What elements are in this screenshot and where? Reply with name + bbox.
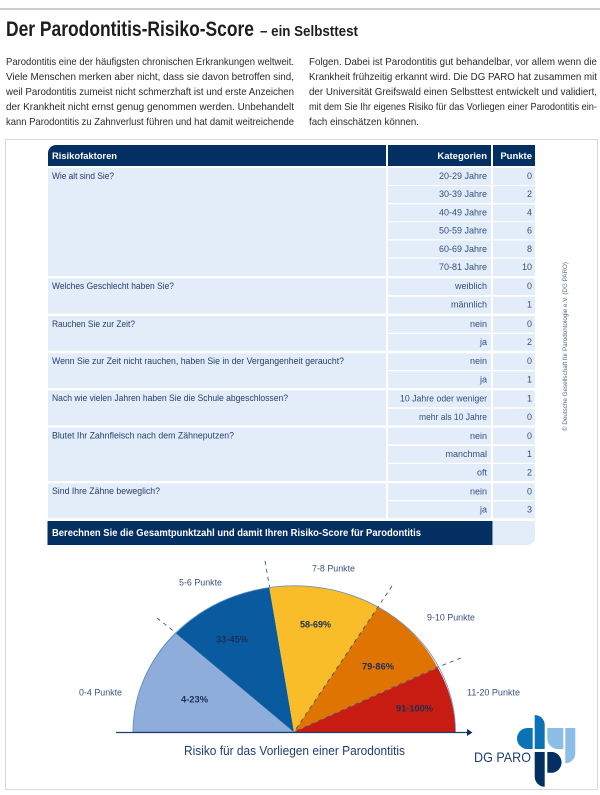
question: loose teeth: 0	[527, 486, 532, 496]
segment: 5-6 Punkte	[176, 587, 294, 732]
question: loose teeth: Sind Ihre Zähne beweglich?	[52, 486, 160, 496]
question: school years: Nach wie vielen Jahren haben Sie die Schule abgeschlossen?	[52, 393, 288, 403]
point range labels: 7-8 Punkte	[312, 564, 355, 574]
question: loose teeth: 3	[527, 504, 532, 514]
question: bleeding gums	[48, 428, 535, 481]
question: gender: Welches Geschlecht haben Sie?	[52, 281, 174, 291]
question: gender: männlich	[451, 300, 487, 310]
question: bleeding gums: nein	[470, 431, 487, 441]
table header: Kategorien	[437, 151, 487, 162]
intro text: right column: fach einschätzen können.	[309, 116, 419, 128]
percent labels: 79-86%	[362, 662, 395, 672]
question: age: 60-69 Jahre	[439, 244, 487, 254]
chart caption: Risiko für das Vorliegen einer Parodontitis	[184, 743, 405, 758]
question: former smoking: Wenn Sie zur Zeit nicht rauchen, haben Sie in der Vergangenheit geraucht?	[52, 356, 344, 366]
logo: DG PARO	[474, 715, 575, 787]
question: bleeding gums: 0	[527, 431, 532, 441]
question: former smoking: 0	[527, 356, 532, 366]
percent labels: 58-69%	[300, 620, 332, 630]
question: age: 2	[527, 189, 532, 199]
point range labels	[79, 564, 520, 698]
intro text: left column: kann Parodontitis zu Zahnverlust führen und hat damit weitreichende	[6, 116, 294, 128]
intro text: left column: Parodontitis eine der häufigsten chronischen Erkrankungen weltweit.	[6, 56, 294, 68]
question: former smoking: ja	[479, 374, 487, 384]
question: former smoking: nein	[470, 356, 487, 366]
percent labels	[181, 620, 434, 714]
question: smoking: 0	[527, 319, 532, 329]
question: age: 0	[527, 171, 532, 181]
question: age: 50-59 Jahre	[439, 226, 487, 236]
dashed boundary ticks	[157, 561, 461, 732]
question: smoking: Rauchen Sie zur Zeit?	[52, 319, 135, 329]
question: gender: 1	[527, 300, 532, 310]
intro text: left column	[5, 56, 294, 128]
question: bleeding gums: Blutet Ihr Zahnfleisch nach dem Zähneputzen?	[52, 430, 234, 440]
question: former smoking	[48, 353, 535, 388]
semicircle risk chart	[79, 561, 520, 758]
question: smoking: 2	[527, 337, 532, 347]
question: age	[48, 168, 535, 276]
table: risk factors	[48, 145, 535, 545]
question: gender	[48, 278, 535, 314]
question: age: 70-81 Jahre	[439, 262, 487, 272]
question: loose teeth: nein	[470, 486, 487, 496]
segment: 7-8 Punkte	[269, 585, 378, 732]
axis arrow	[116, 729, 472, 736]
question: gender: weiblich	[454, 281, 487, 291]
question: bleeding gums: 1	[527, 449, 532, 459]
question: bleeding gums: manchmal	[445, 449, 487, 459]
point range labels: 0-4 Punkte	[79, 688, 122, 698]
question: gender: 0	[527, 281, 532, 291]
question: loose teeth: ja	[479, 504, 487, 514]
title: Der Parodontitis-Risiko-Score	[6, 17, 254, 41]
question: smoking: ja	[479, 337, 487, 347]
question: age: 10	[522, 262, 532, 272]
question: school years	[48, 390, 535, 425]
point range labels: 11-20 Punkte	[467, 688, 520, 698]
logo: DG PARO: DG PARO	[474, 749, 531, 765]
question: former smoking: 1	[527, 374, 532, 384]
question: age: 40-49 Jahre	[439, 208, 487, 218]
table header: Risikofaktoren	[52, 151, 117, 162]
percent labels: 4-23%	[181, 694, 209, 706]
point range labels: 5-6 Punkte	[179, 578, 222, 588]
percent labels: 33-45%	[216, 634, 249, 646]
total score bar	[48, 521, 535, 545]
segment: 9-10 Punkte	[294, 607, 438, 732]
question: age: 20-29 Jahre	[439, 171, 487, 181]
question: age: 30-39 Jahre	[439, 189, 487, 199]
question: smoking	[48, 316, 535, 351]
question: loose teeth	[48, 483, 535, 518]
total score bar: Berechnen Sie die Gesamtpunktzahl und damit Ihren Risiko-Score für Parodontitis	[52, 528, 421, 539]
intro text: right column	[309, 56, 597, 128]
question: age: 6	[527, 226, 532, 236]
intro text: left column: weil Parodontitis zumeist nicht schmerzhaft ist und erste Anzeichen	[5, 86, 294, 98]
question: school years: 0	[527, 412, 532, 422]
question: bleeding gums: 2	[527, 468, 532, 478]
point range labels: 9-10 Punkte	[427, 612, 475, 624]
question: age: Wie alt sind Sie?	[52, 171, 114, 181]
segment: 0-4 Punkte	[133, 633, 294, 732]
question: school years: mehr als 10 Jahre	[419, 412, 487, 422]
percent labels: 91-100%	[396, 704, 434, 714]
question: smoking: nein	[470, 319, 487, 329]
intro text: left column: Viele Menschen merken aber nicht, dass sie davon betroffen sind,	[6, 71, 294, 83]
question: age: 8	[527, 244, 532, 254]
title: – ein Selbsttest	[260, 23, 358, 40]
arc outline	[133, 586, 456, 732]
copyright note: © Deutsche Gesellschaft für Parodontologie e.V. (DG PARO)	[561, 262, 569, 431]
table header: Punkte	[500, 151, 532, 162]
question: school years: 1	[527, 394, 532, 404]
table header	[48, 145, 535, 166]
segment: 11-20 Punkte	[294, 668, 456, 732]
question: bleeding gums: oft	[477, 468, 487, 478]
question: age: 4	[527, 208, 532, 218]
intro text: left column: der Krankheit nicht ernst genug genommen werden. Unbehandelt	[6, 101, 294, 113]
question: school years: 10 Jahre oder weniger	[400, 394, 487, 404]
